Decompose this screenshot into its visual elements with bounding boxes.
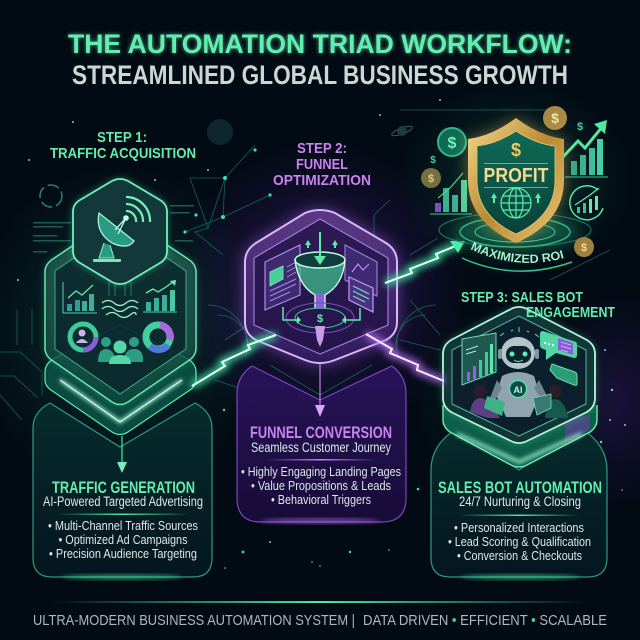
waves [102,270,138,318]
step 2 heading [273,140,371,189]
icon: robot [490,327,548,417]
right bar chart [143,280,177,312]
sales bot text: • Lead Scoring & Qualification [448,534,591,549]
footer text: DATA DRIVEN • EFFICIENT • SCALABLE [363,612,607,629]
step 3 heading: ENGAGEMENT [526,304,615,321]
funnel text: • Highly Engaging Landing Pages [241,464,401,479]
chart screen [462,333,496,385]
step 3 icon hexagon [443,307,597,467]
left donut [70,324,96,350]
profit badge [421,106,608,272]
title [68,29,572,90]
left bar chart [430,173,472,214]
icon: people [470,384,568,418]
left bar chart [63,282,97,313]
traffic text: • Multi-Channel Traffic Sources [48,518,198,533]
funnel text: • Value Propositions & Leads [251,478,391,493]
arrow: lightning traffic to funnel [192,335,276,386]
users icon [98,337,143,364]
speech bubbles [540,331,577,385]
top hexagon [73,179,167,284]
traffic text: • Precision Audience Targeting [49,546,197,561]
circuit rings decoration left [40,185,62,207]
icon: shield: $ [511,140,521,160]
right browser windows [345,245,377,312]
step 2 icon hexagon [245,210,397,363]
arrows and dollar base: $ [317,313,323,325]
step 1 icon stack [45,179,196,434]
traffic text [43,479,203,561]
right donut [146,325,170,350]
maximized roi label: MAXIMIZED ROI [470,242,564,263]
title: THE AUTOMATION TRIAD WORKFLOW: [68,29,572,59]
step 1 heading [50,129,196,162]
coins: $ [551,110,559,126]
sales bot text: 24/7 Nurturing & Closing [459,494,581,509]
funnel text: • Behavioral Triggers [271,492,371,507]
footer divider [50,601,590,603]
ring glow [450,214,580,250]
arrows and dollar base [283,303,360,347]
arrow: down to traffic text [117,436,127,473]
coins [421,106,594,257]
icon: funnel [295,232,345,308]
panel: sales bot automation [431,429,607,580]
traffic text: • Optimized Ad Campaigns [58,532,188,547]
panel: traffic generation [33,403,212,580]
title: THE AUTOMATION TRIAD WORKFLOW: [68,29,572,59]
footer text: ULTRA-MODERN BUSINESS AUTOMATION SYSTEM | [33,612,355,629]
planet [207,119,233,145]
footer text [33,612,607,629]
step 1 heading: TRAFFIC ACQUISITION [50,145,196,162]
coins: $ [428,173,434,185]
step 2 heading: FUNNEL [296,156,348,173]
growth circle [570,186,603,220]
traffic text: AI-Powered Targeted Advertising [43,494,203,509]
base layer [45,325,196,434]
left browser window [265,245,300,310]
arrow: lightning funnel to profit [385,241,465,283]
icon: shield: PROFIT [484,165,548,187]
panel: funnel conversion [237,363,406,524]
step 2 heading: OPTIMIZATION [273,172,371,189]
sales bot text: • Conversion & Checkouts [457,548,582,563]
traffic text: TRAFFIC GENERATION [52,479,195,497]
coins: $ [430,155,436,166]
coins: $ [577,121,583,133]
funnel text [241,424,401,507]
icon: satellite dish [93,197,150,262]
step 1 heading: STEP 1: [97,129,147,146]
right bar chart [562,120,608,177]
arrow: down to funnel text [315,363,325,417]
icon: globe [501,188,531,218]
step 3 heading [461,289,615,321]
icon: shield [468,118,564,243]
sales bot text [438,479,602,563]
icon: robot: AI [514,385,522,395]
funnel text: FUNNEL CONVERSION [250,424,392,442]
step 2 heading: STEP 2: [297,140,347,157]
coins: $ [448,135,457,152]
funnel text: Seamless Customer Journey [251,440,391,455]
sales bot text: • Personalized Interactions [454,520,584,535]
step 3 heading: STEP 3: SALES BOT [461,289,583,306]
arrow: lightning funnel to sales bot [366,334,444,381]
large hexagon [45,217,196,404]
coins: $ [581,242,587,254]
